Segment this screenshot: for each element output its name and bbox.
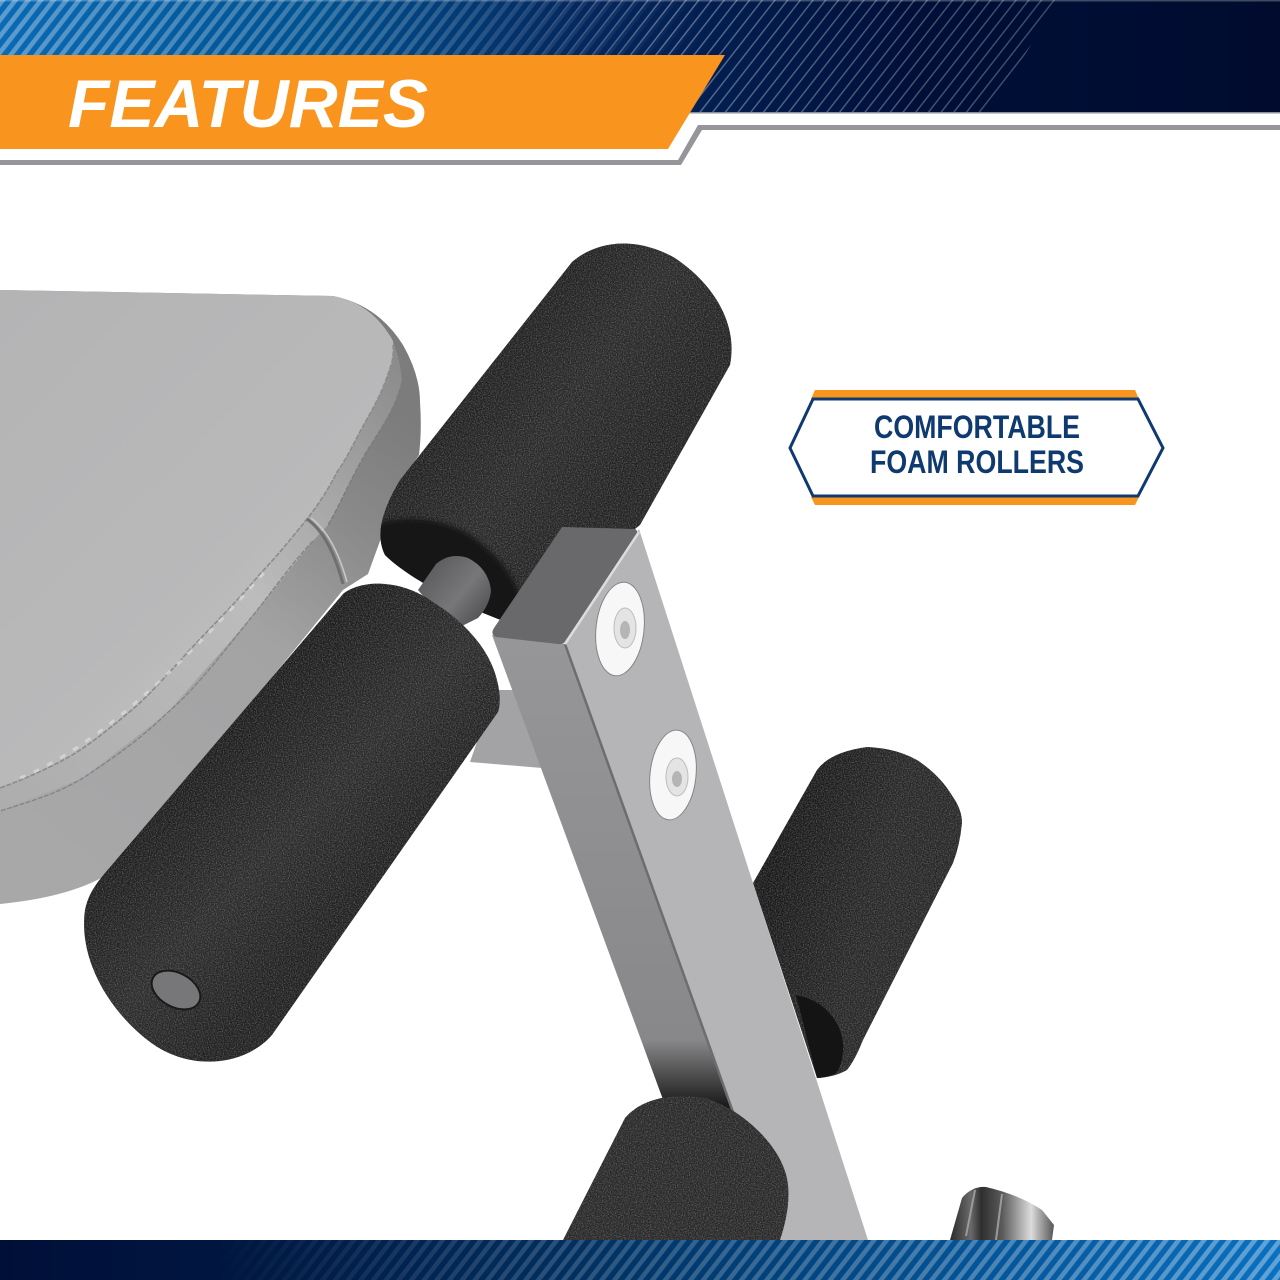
callout: comfortable foam rollers: COMFORTABLE — [874, 409, 1080, 445]
right foam roller — [753, 747, 962, 1078]
seat pad — [0, 290, 421, 904]
connecting axle pin — [418, 556, 491, 626]
frame light side — [565, 529, 868, 1240]
title banner — [0, 55, 725, 149]
gray accent line under header — [0, 125, 1280, 165]
frame top end face — [492, 527, 637, 644]
square tube frame — [492, 527, 868, 1240]
rear support bracket — [470, 690, 542, 768]
header band — [0, 0, 1280, 114]
upper foam roller — [380, 243, 732, 625]
lower bolt — [645, 728, 701, 822]
upper bolt — [591, 580, 649, 678]
frame dark side — [492, 635, 733, 1112]
roller end shadow — [380, 516, 520, 620]
front foam roller — [84, 584, 500, 1062]
frame inner edge — [565, 644, 733, 1112]
callout: comfortable foam rollers: FOAM ROLLERS — [870, 444, 1084, 480]
title: FEATURES — [68, 66, 428, 142]
callout: comfortable foam rollers — [790, 390, 1163, 505]
roller end cap — [145, 963, 207, 1017]
adjustment knob — [950, 1187, 1054, 1240]
product photo: bench with foam rollers — [0, 243, 1054, 1240]
lower foam roller — [563, 1096, 788, 1240]
footer band — [0, 1240, 1280, 1280]
